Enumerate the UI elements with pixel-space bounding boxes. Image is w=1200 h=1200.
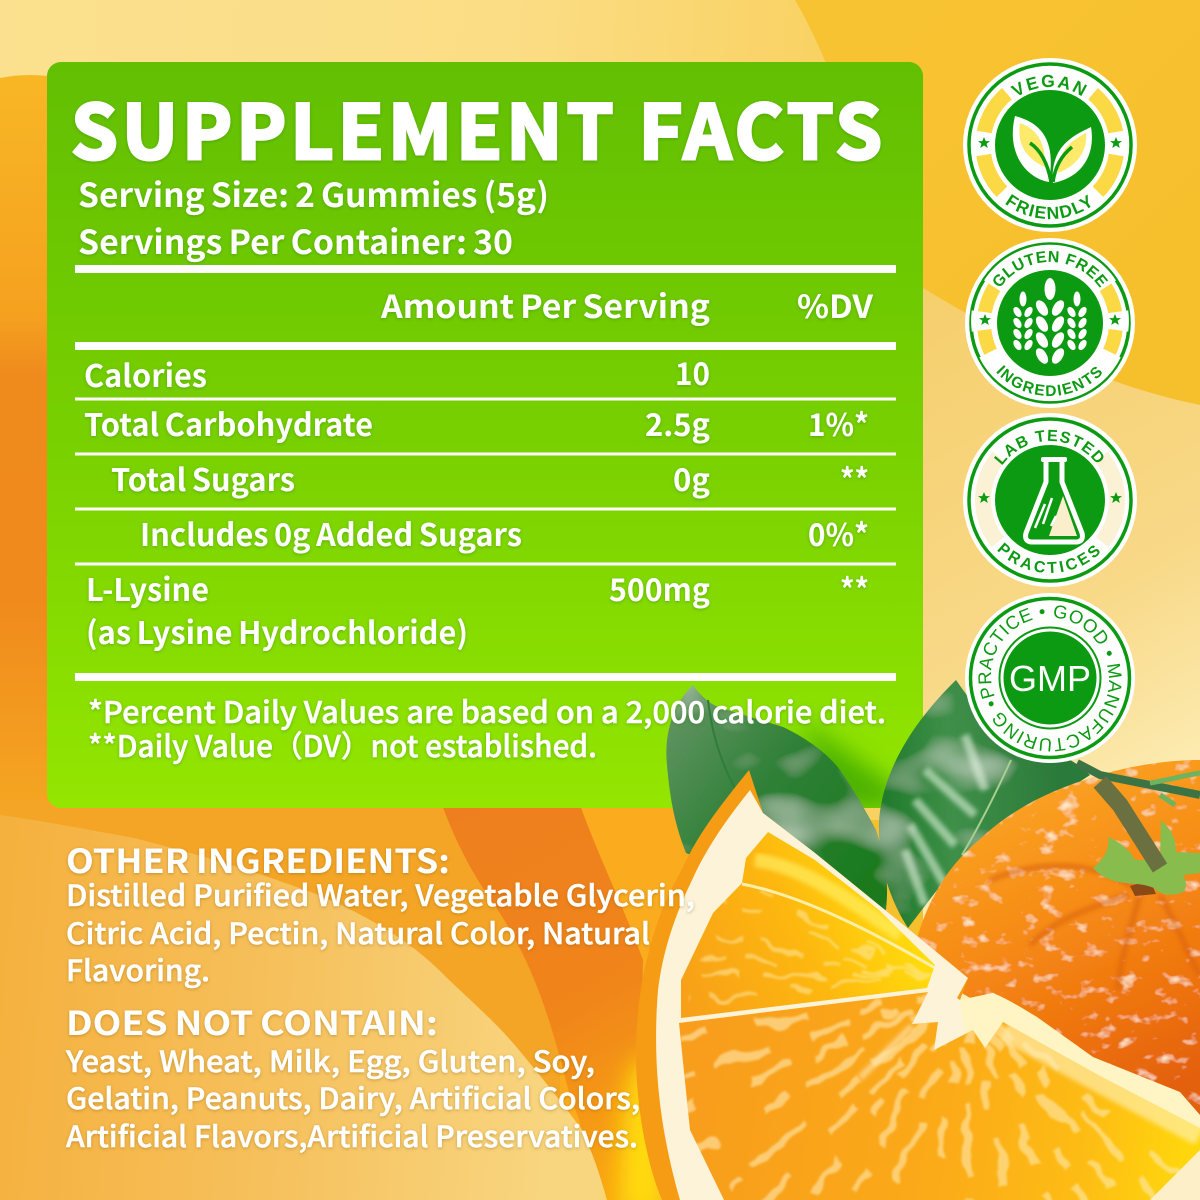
table rows: 0%* [808,510,869,555]
text block: does not contain [65,997,640,1156]
peel [636,770,1200,1200]
badge: vegan friendly: VEGAN [1010,74,1087,96]
table rows: 10 [675,349,710,394]
text block: other ingredients [66,835,695,990]
badge: lab tested practices: PRACTICES [997,542,1100,573]
icon: orange stem [1077,763,1200,896]
table rows: 1%* [808,400,869,445]
table rows: L-Lysine [86,565,209,610]
table header [380,282,873,328]
table header: Amount Per Serving [380,282,710,328]
badge: GMP: PRACTICE • GOOD • MANUFACTURING • [978,606,1122,752]
table rows: 0g [673,455,710,500]
serving info [78,169,549,264]
table rows: Includes 0g Added Sugars [140,510,522,555]
footnotes: **Daily Value（DV）not established. [88,722,597,766]
table rows: 500mg [609,565,710,610]
icon: flask [1026,457,1082,542]
badge: lab tested practices [963,413,1137,587]
text block: does not contain: Artificial Flavors,Artificial Preservatives. [66,1114,638,1156]
table header: %DV [797,282,873,328]
icon: right leaf [879,680,1090,928]
lower segments [679,990,1200,1200]
footnotes: *Percent Daily Values are based on a 2,000 calorie diet. [88,688,886,732]
icon: orange wedge [636,770,1200,1200]
icon: whole orange [915,760,1200,1125]
text block: other ingredients: Citric Acid, Pectin, Natural Color, Natural [66,911,650,953]
pith [656,790,1003,1200]
badge: GMP: GMP [1009,658,1091,699]
badge: gluten free ingredients: INGREDIENTS [996,365,1102,396]
badge: gluten free ingredients: GLUTEN FREE [993,250,1108,288]
table rows: ** [840,455,869,500]
badge: vegan friendly [963,58,1137,232]
text block: does not contain: DOES NOT CONTAIN: [66,997,438,1045]
table rows: ** [840,565,869,610]
panel dividers [75,265,896,681]
footnotes [88,688,886,766]
heading: supplement facts: SUPPLEMENT FACTS [71,72,882,181]
table rows: Total Carbohydrate [84,400,373,445]
badge: gluten free ingredients [965,238,1135,408]
text block: does not contain: Gelatin, Peanuts, Dairy, Artificial Colors, [66,1076,640,1118]
text block: other ingredients: Distilled Purified Water, Vegetable Glycerin, [66,873,695,915]
text block: other ingredients: OTHER INGREDIENTS: [66,835,450,883]
upper segment [681,832,935,1018]
leaf shadow on panel [800,720,900,810]
table rows [84,349,869,653]
serving info: Serving Size: 2 Gummies (5g) [78,169,549,217]
table rows: 2.5g [645,400,710,445]
table rows: (as Lysine Hydrochloride) [86,608,468,653]
table rows: Calories [84,351,207,396]
serving info: Servings Per Container: 30 [78,216,513,264]
illustration: leaves and orange [636,680,1200,1200]
icon: leaves [1013,116,1092,183]
icon: left leaf [666,685,887,910]
panel: supplement facts background [47,62,923,808]
text block: other ingredients: Flavoring. [66,948,210,990]
table rows: Total Sugars [111,455,295,500]
text block: does not contain: Yeast, Wheat, Milk, Egg, Gluten, Soy, [65,1039,595,1081]
badge: lab tested practices: LAB TESTED [994,430,1104,465]
icon: wheat [1012,278,1088,366]
badge: vegan friendly: FRIENDLY [1005,194,1090,220]
